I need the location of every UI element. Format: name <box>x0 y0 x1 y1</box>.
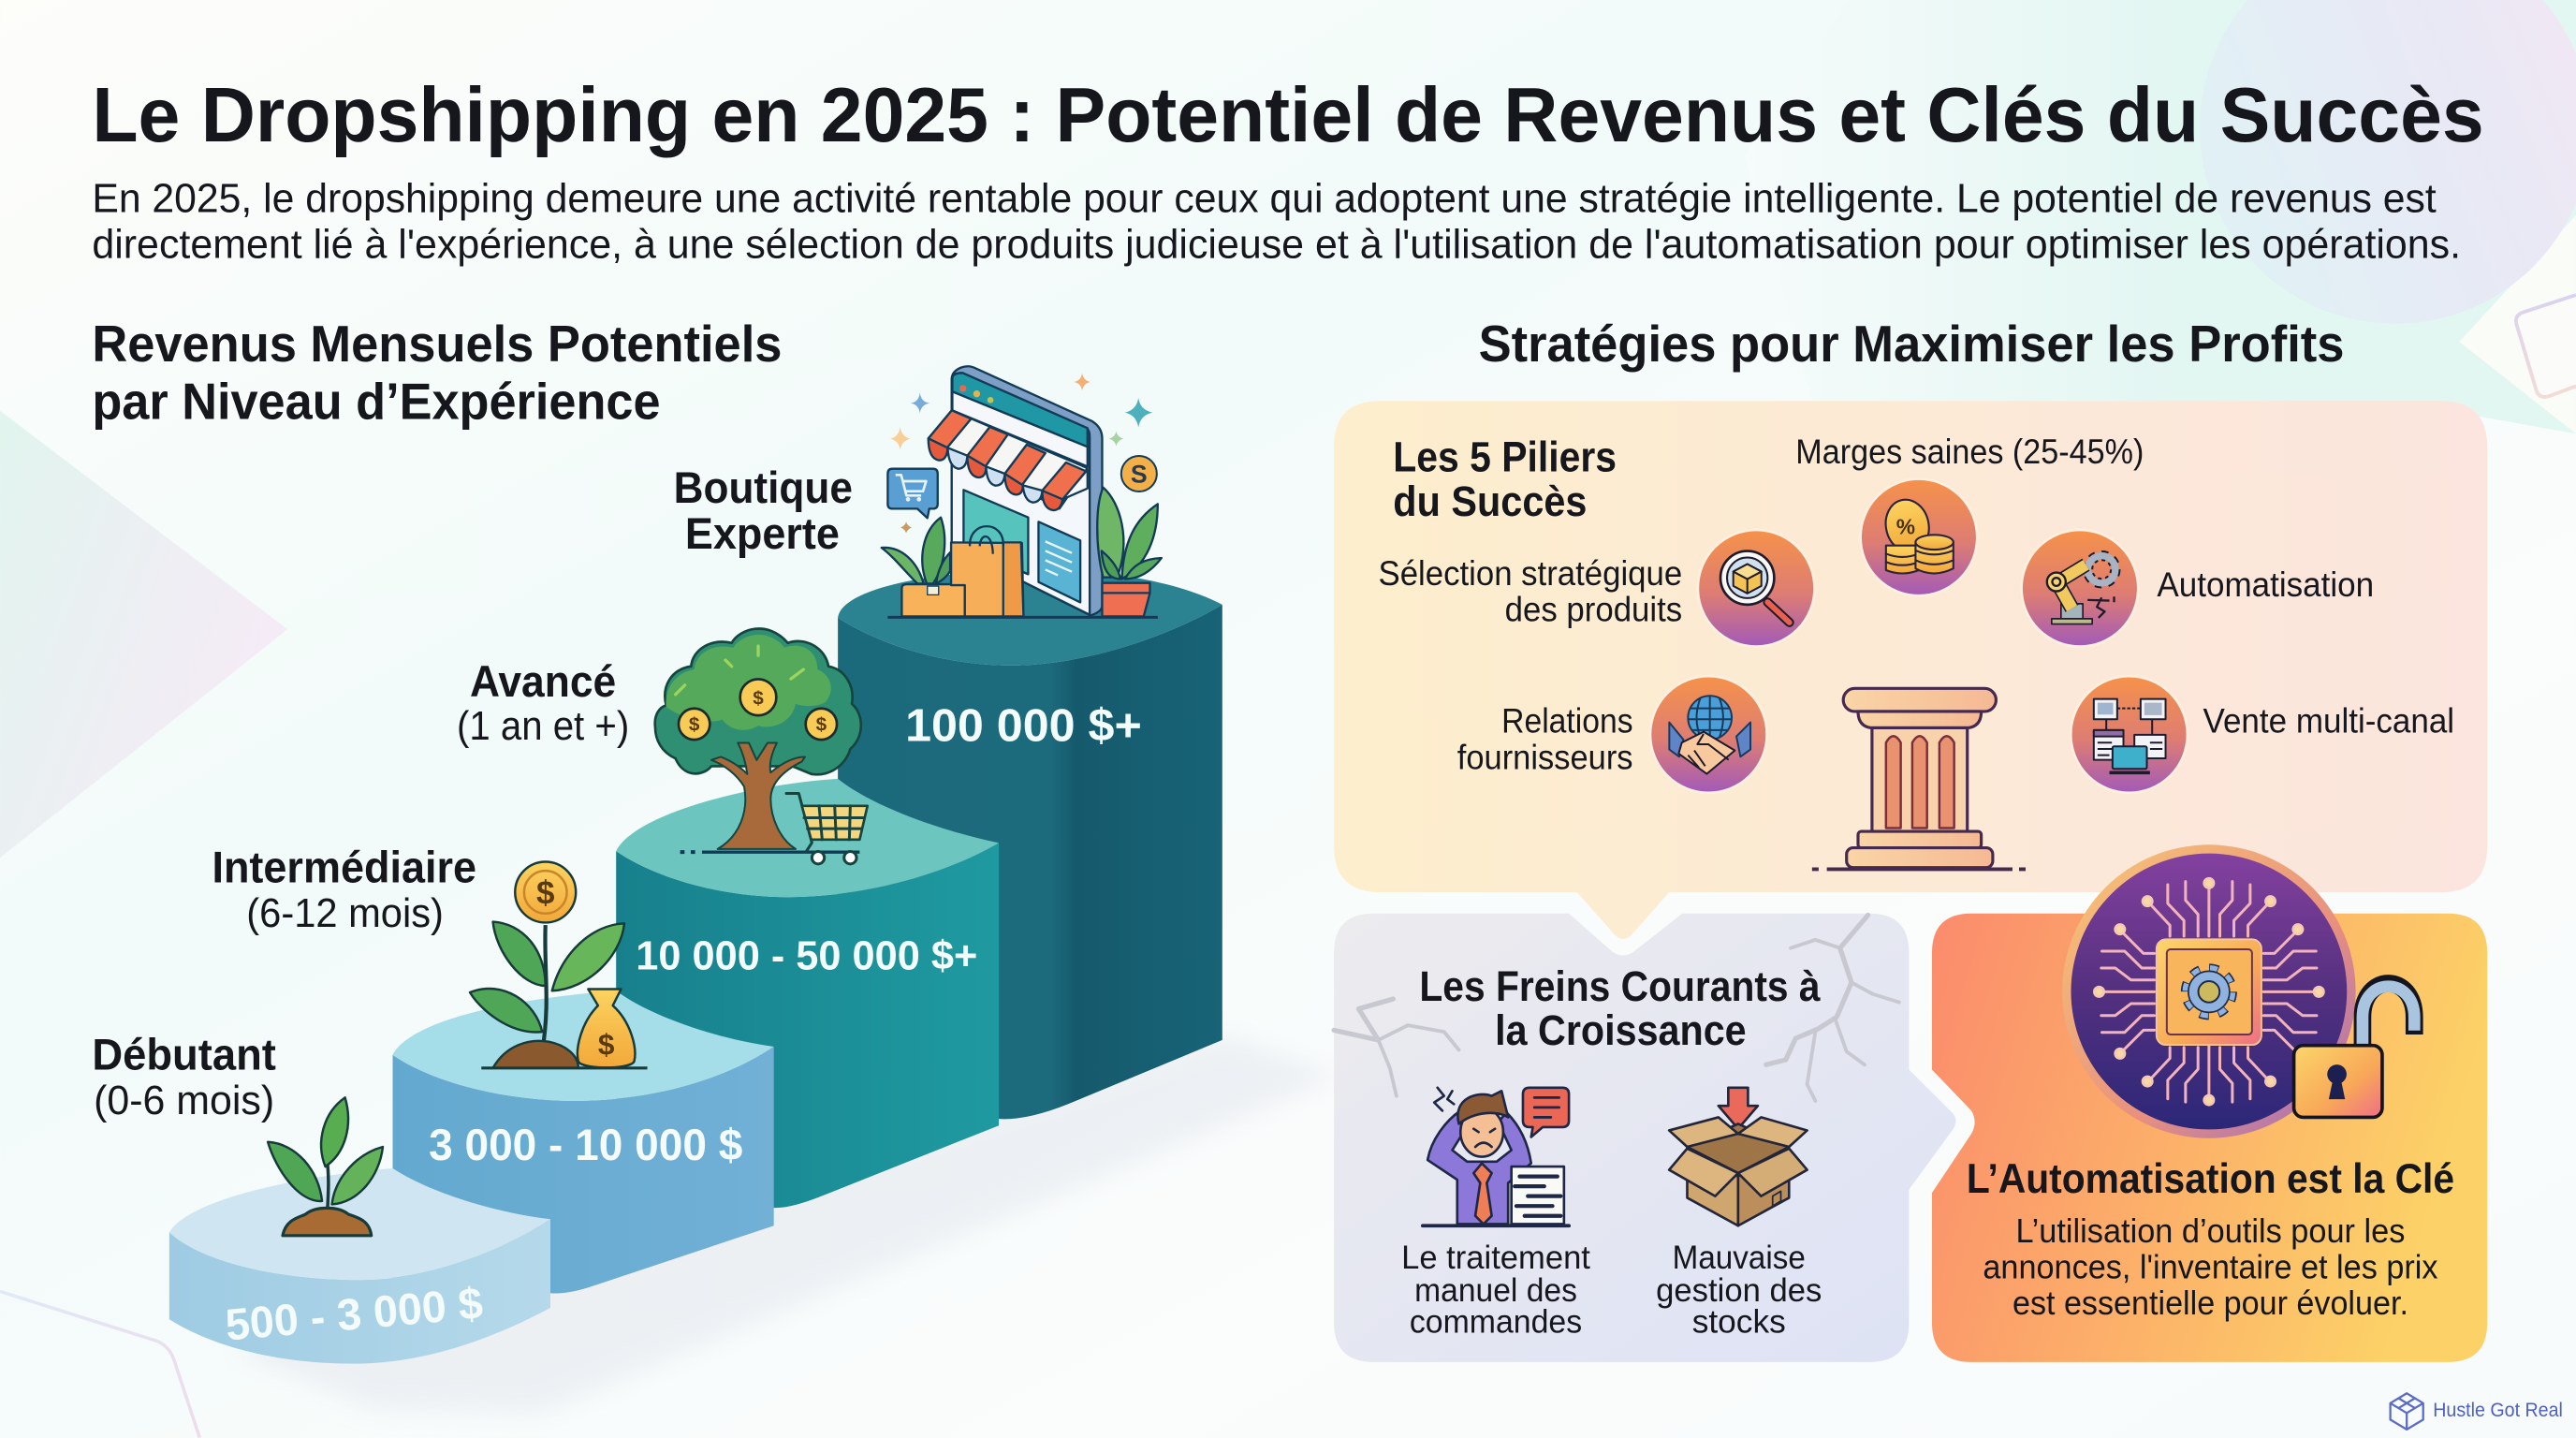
icon: open box <box>1669 1088 1808 1225</box>
automatisation text: L’utilisation d’outils pour les <box>2015 1211 2405 1250</box>
watermark: hustle got real: Hustle Got Real <box>2433 1400 2563 1421</box>
step 2: intermédiaire: 3 000 - 10 000 $ <box>429 1121 742 1170</box>
label: avancé: (1 an et +) <box>457 703 629 749</box>
pillar: sélection stratégique <box>1379 530 1814 647</box>
label: intermédiaire <box>212 843 476 936</box>
freins label: gestion des stocks <box>1656 1240 1822 1340</box>
icon: sprout <box>268 1097 383 1236</box>
freins label: gestion des stocks: stocks <box>1692 1303 1786 1340</box>
freins label: traitement manuel: commandes <box>1410 1303 1582 1340</box>
panel: les 5 piliers <box>1334 401 2487 939</box>
piliers heading: Les 5 Piliers <box>1393 433 1617 481</box>
label: boutique experte: Experte <box>685 509 840 559</box>
icon: money tree: $ <box>689 713 700 735</box>
pillar: marges saines: % <box>1896 514 1915 538</box>
freins heading <box>1419 962 1821 1054</box>
heading: revenus: Revenus Mensuels Potentiels <box>92 315 782 373</box>
step 1: débutant: 500 - 3 000 $ <box>224 1279 485 1351</box>
piliers heading: du Succès <box>1393 477 1587 525</box>
step 1: débutant <box>169 1168 550 1364</box>
automatisation text: est essentielle pour évoluer. <box>2012 1284 2408 1322</box>
step 4: boutique experte: 100 000 $+ <box>905 701 1142 752</box>
heading: stratégies: Stratégies pour Maximiser les Profits <box>1479 315 2344 373</box>
icon: money tree: $ <box>816 713 827 735</box>
pillar: vente multi-canal: Vente multi-canal <box>2203 702 2454 741</box>
stair chart <box>169 570 1222 1364</box>
freins label: traitement manuel: Le traitement <box>1401 1240 1590 1276</box>
label: intermédiaire: Intermédiaire <box>212 843 476 892</box>
pillar: automatisation <box>2022 530 2374 647</box>
icon: online store: S <box>1131 460 1148 488</box>
label: avancé: Avancé <box>470 657 616 707</box>
icon: coin plant and money bag <box>470 862 648 1068</box>
icon: coin plant and money bag: $ <box>536 874 555 911</box>
title: Le Dropshipping en 2025 : Potentiel de Revenus et Clés du Succès <box>92 72 2484 158</box>
icon: circuit chip <box>2062 844 2356 1138</box>
icon: open padlock <box>2294 983 2414 1117</box>
pillar: sélection stratégique: Sélection stratégique <box>1379 554 1682 593</box>
piliers heading <box>1393 433 1617 525</box>
freins label: gestion des stocks: Mauvaise <box>1673 1240 1806 1276</box>
pillar: marges saines <box>1795 433 2144 595</box>
pillar: vente multi-canal <box>2071 676 2454 793</box>
icon: pillar column <box>1812 688 2026 869</box>
label: avancé <box>457 657 629 749</box>
intro text: directement lié à l'expérience, à une sélection de produits judicieuse et à l'utilisation de l'automatisation pour optimiser les opérations. <box>92 222 2461 268</box>
icon: coin plant and money bag: $ <box>598 1028 615 1062</box>
freins heading: Les Freins Courants à <box>1419 962 1821 1010</box>
icon: money tree: $ <box>753 687 764 709</box>
heading: revenus <box>92 315 782 431</box>
step 3: avancé <box>616 779 999 1208</box>
label: débutant: Débutant <box>92 1031 276 1080</box>
panel: l'automatisation est la clé <box>1932 844 2487 1362</box>
icon: online store <box>882 366 1162 617</box>
label: boutique experte: Boutique <box>674 463 853 513</box>
freins label: traitement manuel: manuel des <box>1414 1272 1577 1309</box>
pillar: relations fournisseurs: fournisseurs <box>1457 738 1633 776</box>
label: intermédiaire: (6-12 mois) <box>246 890 444 936</box>
freins label: gestion des stocks: gestion des <box>1656 1272 1822 1309</box>
watermark: hustle got real <box>2391 1393 2563 1430</box>
panel: les freins courants <box>1334 914 1955 1362</box>
freins label: traitement manuel <box>1401 1240 1590 1340</box>
icon: shopping cart <box>786 793 868 864</box>
intro text <box>92 175 2461 268</box>
intro text: En 2025, le dropshipping demeure une activité rentable pour ceux qui adoptent une stratégie intelligente. Le potentiel de revenus est <box>92 175 2437 221</box>
pillar: sélection stratégique: des produits <box>1505 590 1682 628</box>
icon: stressed man <box>1423 1088 1569 1225</box>
pillar: relations fournisseurs: Relations <box>1501 702 1633 741</box>
pillar: automatisation: Automatisation <box>2157 565 2374 604</box>
icon: money tree <box>655 629 861 852</box>
step 2: intermédiaire <box>393 990 774 1293</box>
pillar: relations fournisseurs <box>1457 676 1767 793</box>
label: boutique experte <box>674 463 853 559</box>
automatisation text <box>1983 1211 2438 1322</box>
automatisation text: annonces, l'inventaire et les prix <box>1983 1247 2438 1285</box>
label: débutant: (0-6 mois) <box>94 1078 274 1123</box>
pillar: marges saines: Marges saines (25-45%) <box>1795 433 2144 471</box>
label: débutant <box>92 1031 276 1123</box>
freins heading: la Croissance <box>1495 1006 1747 1054</box>
step 3: avancé: 10 000 - 50 000 $+ <box>636 932 977 978</box>
cracks <box>1334 916 1899 1101</box>
automatisation heading: L’Automatisation est la Clé <box>1967 1155 2454 1202</box>
heading: revenus: par Niveau d’Expérience <box>92 374 661 431</box>
step 4: boutique experte <box>838 570 1222 1119</box>
